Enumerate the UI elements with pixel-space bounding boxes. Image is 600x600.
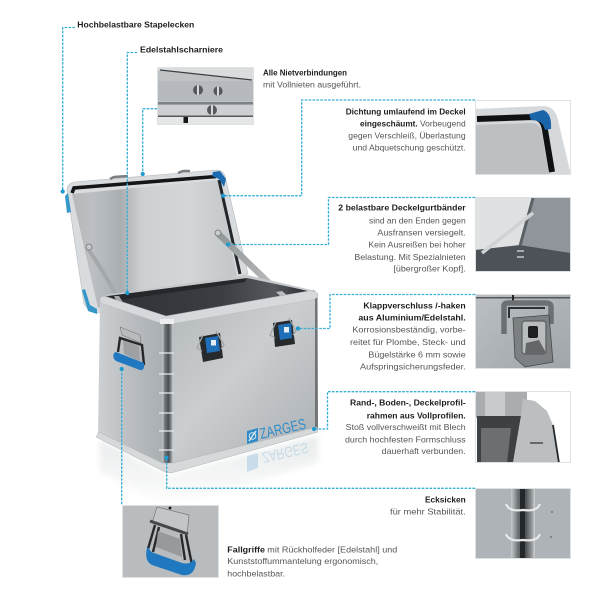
text: latch: Aufspringsicherungsfeder. [360,361,466,371]
text: rivets: mit Vollnieten ausgeführt. [263,79,361,89]
thumbnail: latch [475,294,571,369]
text: profile frames: dauerhaft verbunden. [382,446,466,456]
text: drop handle: mit Rückholfeder [Edelstahl] und [267,544,398,554]
text: latch [350,300,466,371]
text: lid straps: 2 belastbare Deckelgurtbänder [338,203,466,213]
text: corner beads [390,494,466,517]
text: seal: und Abquetschung geschützt. [353,143,466,153]
thumbnail: lid strap [475,197,571,272]
box interior [106,276,316,320]
text: seal: Vorbeugend [420,119,466,129]
bottom rim [96,427,318,473]
text: seal: Dichtung umlaufend im Deckel [346,106,466,116]
text: latch: aus Aluminium/Edelstahl. [358,313,466,323]
text: lid straps: [übergroßer Kopf]. [393,264,466,274]
text: drop handle: hochbelastbar. [227,569,285,579]
text: seal: eingeschäumt. [360,119,418,129]
text: corner beads: Ecksicken [425,494,466,504]
right latch [270,318,296,347]
text: latch: Bügelstärke 6 mm sowie [368,349,466,359]
ZARGES logo: ZARGES [258,416,308,443]
left side face [98,303,167,466]
text: latch: Korrosionsbeständig, vorbe- [352,325,466,335]
thumbnail: drop handle [122,505,219,578]
text: seal [346,106,466,153]
lid straps [86,230,286,304]
left latch [197,331,224,362]
corner profile with beads [159,319,174,466]
ZARGES reflection [247,439,310,472]
text: latch: reitet für Plombe, Steck- und [350,337,466,347]
thumbnail: corner beads [475,488,571,559]
text: drop handle: Kunststoffummantelung ergonomisch, [227,556,378,566]
side handle [113,327,144,370]
right edge [315,297,318,430]
ZARGES logo [247,416,308,444]
ZARGES reflection: ZARGES [260,439,310,466]
text: profile frames: rahmen aus Vollprofilen. [367,410,466,420]
thumbnail: seal [475,100,571,175]
rear strap overlap [114,296,124,304]
text: profile frames: Stoß vollverschweißt mit Blech [346,422,466,432]
box rim [100,290,318,325]
text: seal: gegen Verschleiß, Überlastung [348,131,466,141]
label: stacking corners: Hochbelastbare Stapelecken [77,20,194,30]
thumbnail: rivets [157,67,254,125]
text: rivets [263,68,361,89]
open lid [65,170,248,314]
text: lid straps: Ausfransen versiegelt. [377,227,466,237]
floor reflection [100,436,318,508]
text: corner beads: für mehr Stabilität. [390,507,466,517]
front face [165,299,317,466]
text: profile frames: Rand-, Boden-, Deckelprofil- [350,398,466,408]
product illustration: open aluminium box [65,170,318,473]
text: lid straps: sind an den Enden gegen [369,215,466,225]
label: stainless hinges: Edelstahlscharniere [140,45,223,55]
leader lines and anchor dots [61,28,475,505]
text: lid straps: Belastung. Mit Spezialnieten [354,252,466,262]
thumbnail: profile corner [475,391,571,463]
text: profile frames [345,398,466,456]
text: latch: Klappverschluss /-haken [363,300,466,310]
text: profile frames: durch hochfesten Formschluss [345,434,466,444]
text: lid straps: Kein Ausreißen bei hoher [368,240,466,250]
text: drop handle [227,544,398,579]
text: lid straps [338,203,466,274]
text: rivets: Alle Nietverbindungen [263,68,347,78]
text: drop handle: Fallgriffe [227,544,265,554]
